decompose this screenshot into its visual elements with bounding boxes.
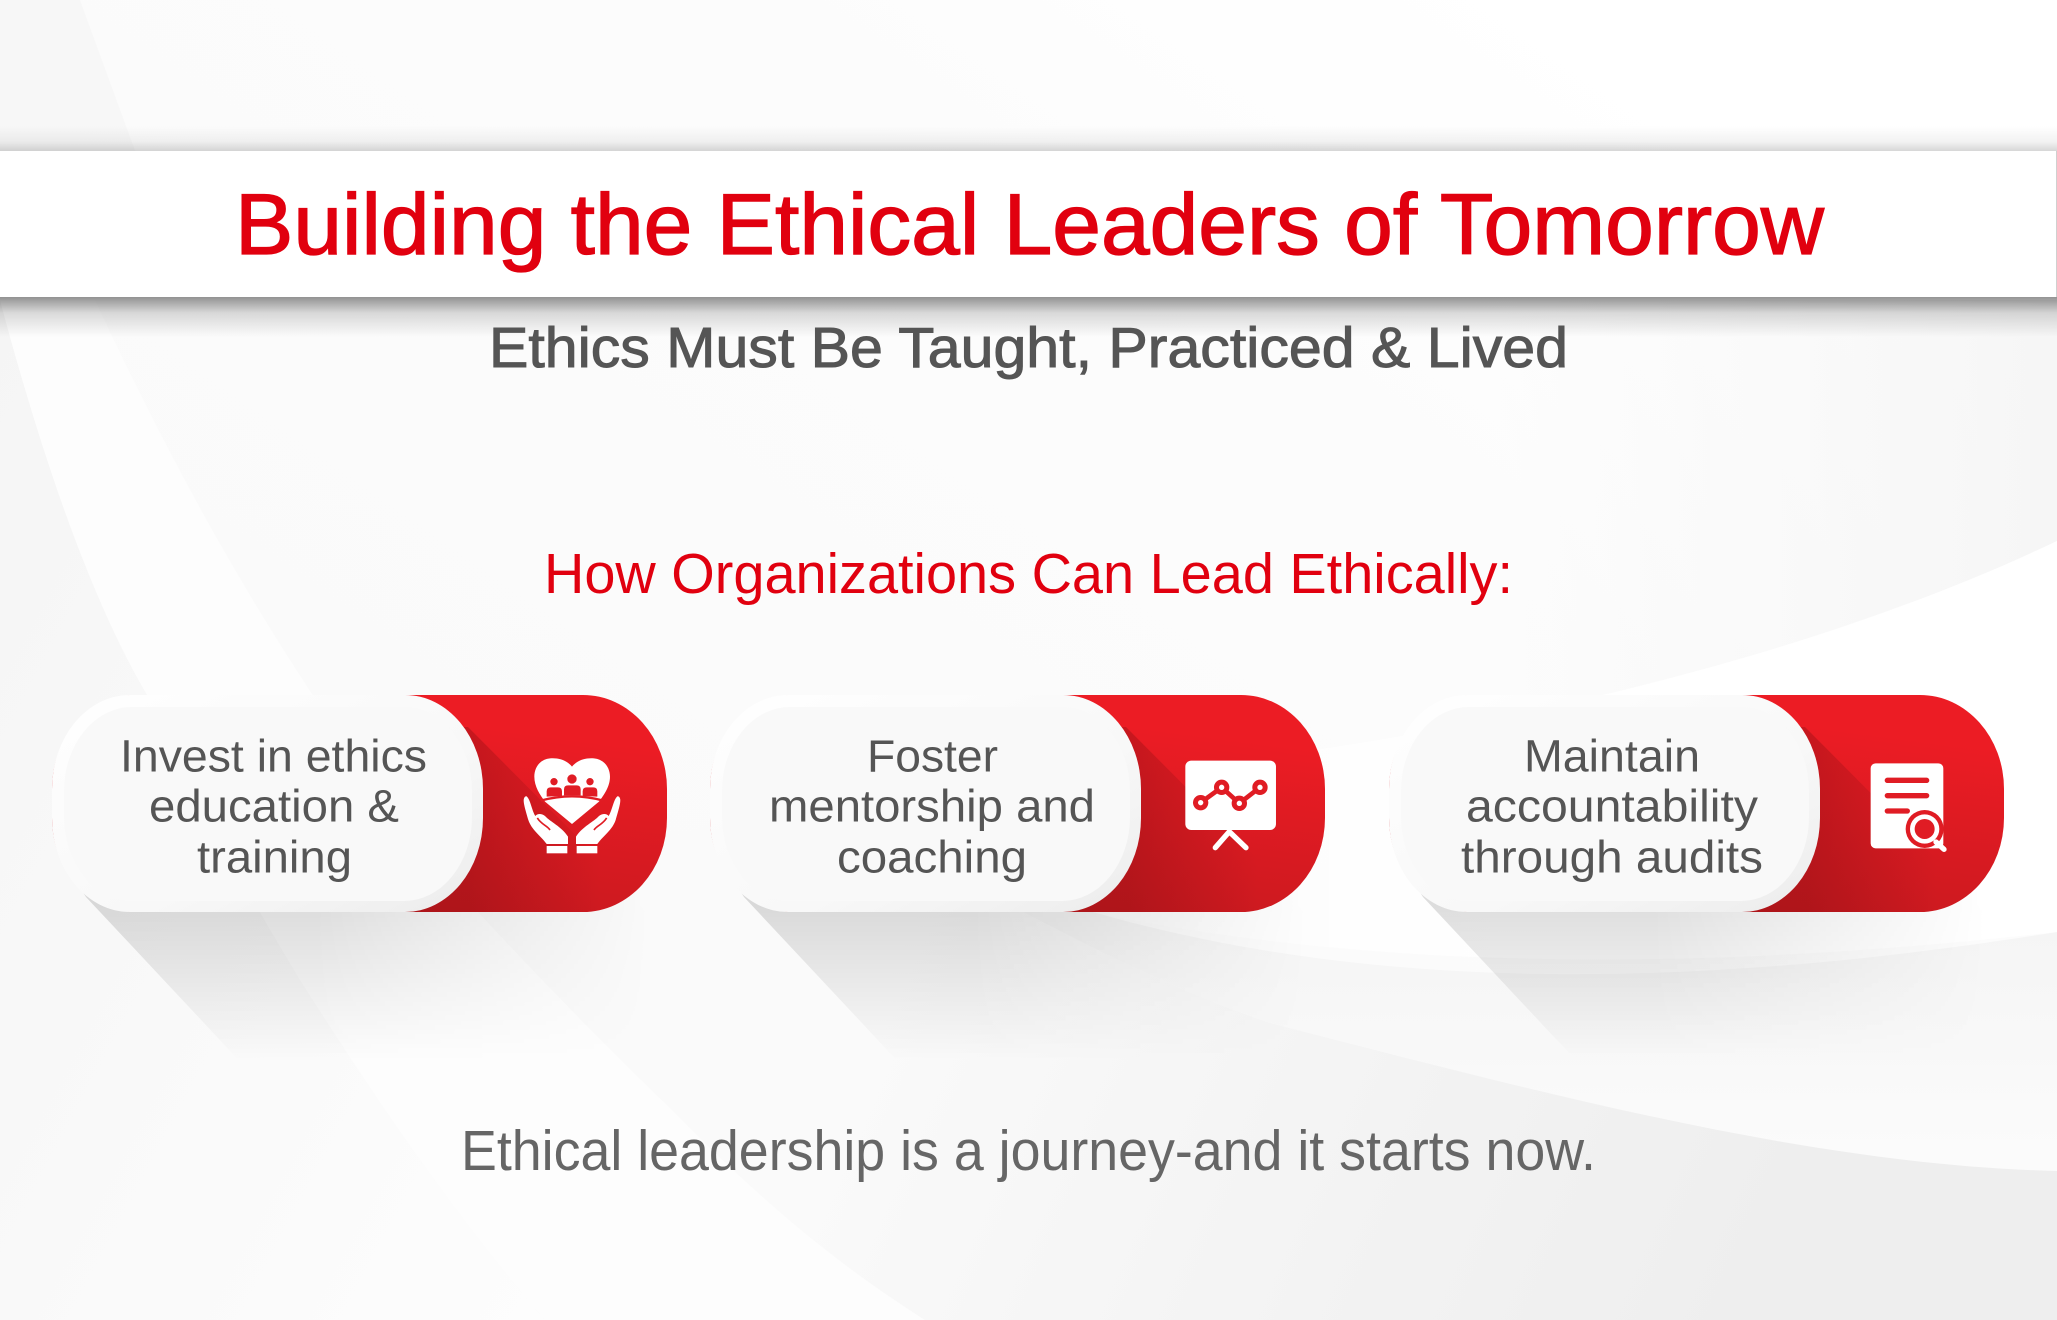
card: audits [1389,695,2004,1020]
closing line: Ethical leadership is a journey-and it starts now. [461,1119,1596,1183]
subtitle: Ethics Must Be Taught, Practiced & Lived [489,316,1568,380]
title band [0,126,2057,337]
card text: mentorship and [769,780,1095,832]
card text: coaching [837,832,1027,882]
section heading: How Organizations Can Lead Ethically: [544,542,1513,606]
card text: through audits [1461,832,1763,882]
card: education [52,695,667,1020]
icon: presentation board with line chart [1185,761,1276,848]
card text: Invest in ethics [120,730,427,782]
card text: accountability [1466,780,1759,832]
title: Building the Ethical Leaders of Tomorrow [235,177,1825,273]
card: mentorship [710,695,1325,1020]
card text: education & [149,780,399,832]
icon: document with magnifier [1871,763,1944,849]
icon: hands holding heart with people [524,758,620,853]
card text: Maintain [1524,730,1700,782]
card text: Foster [867,730,998,782]
card text: training [197,832,352,882]
